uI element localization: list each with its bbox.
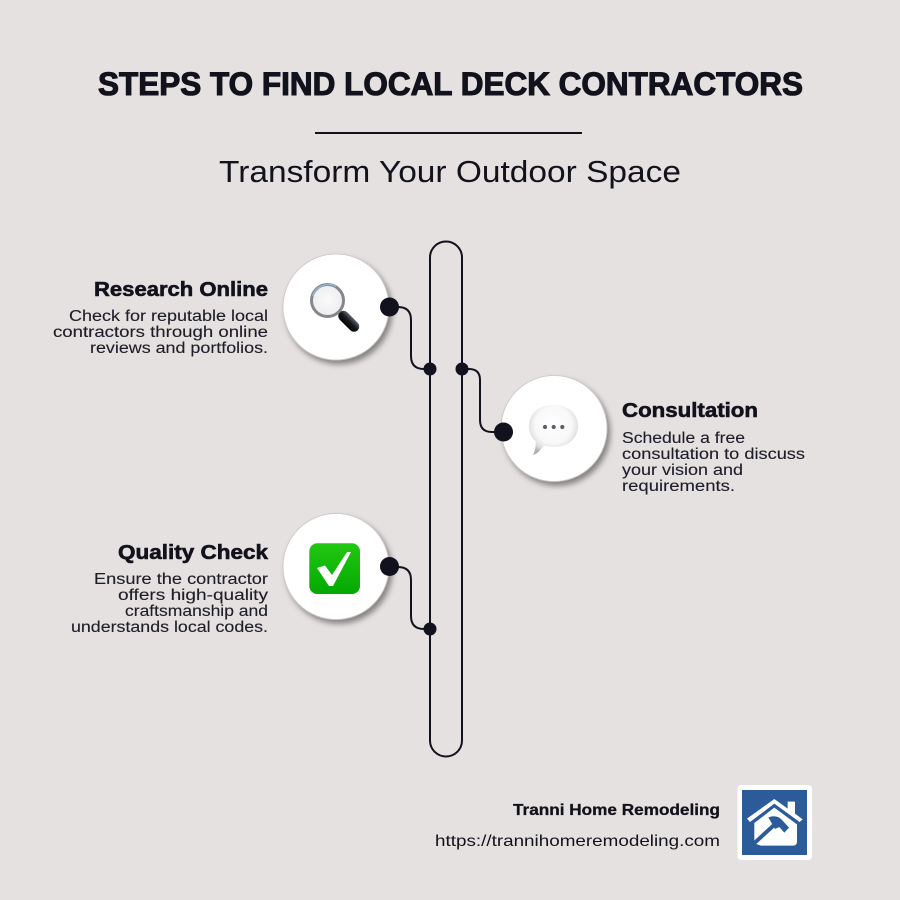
footer: url: https://trannihomeremodeling.com [435,833,720,850]
icon: green check mark [309,543,360,594]
icon: magnifying glass [312,284,354,326]
step 2: node [494,422,513,442]
step 3: node [380,557,399,576]
step 2: connector [462,369,504,432]
timeline spine [430,242,462,756]
step 1: text: contractors through online [53,324,268,341]
step 2: consultation icon [501,376,607,482]
step 3: quality check icon [283,514,389,620]
step 2: text: your vision and [622,462,743,479]
step 1: text: reviews and portfolios. [90,340,268,357]
logo [738,785,812,860]
step 2: text: Schedule a free [622,430,745,447]
step 2: text: requirements. [622,478,735,495]
step 2: text [622,399,805,495]
step 3: connector [389,567,430,629]
step 3: spine dot [424,622,436,636]
step 1: text: Research Online [94,278,268,301]
step 3: text: Quality Check [118,541,269,564]
step 1: research online icon [283,254,389,360]
step 3: text: offers high-quality [118,587,268,604]
step 2: text: Consultation [622,399,758,422]
step 1: text: Check for reputable local [69,308,268,325]
step 1: node [380,298,399,316]
step 1: text [53,278,268,357]
step 2: text: consultation to discuss [622,446,805,463]
step 3: text: craftsmanship and [125,603,268,620]
icon: speech bubble [529,405,578,455]
step 1: spine dot [424,362,436,376]
footer: company name: Tranni Home Remodeling [513,802,720,819]
step 2: spine dot [456,362,468,376]
subtitle: Transform Your Outdoor Space [219,154,681,189]
step 1: connector [389,307,430,369]
step 3: text [71,541,269,636]
title: STEPS TO FIND LOCAL DECK CONTRACTORS [98,66,803,102]
step 3: text: understands local codes. [71,619,268,636]
step 3: text: Ensure the contractor [94,571,268,588]
